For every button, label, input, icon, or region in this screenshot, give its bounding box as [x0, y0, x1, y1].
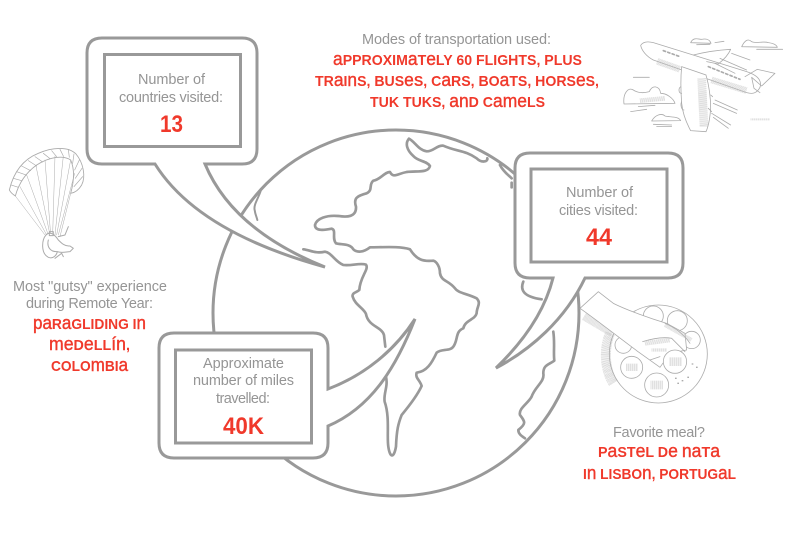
text block: favorite meal — [583, 425, 736, 483]
text block: transportation: TUK TUKS, anD CameLS — [370, 90, 545, 111]
text block: transportation: TRaInS, BUSeS, CaRS, BOaTS, HORSeS, — [315, 69, 599, 90]
text block: favorite meal: In LISBOn, PORTUGaL — [583, 462, 736, 483]
text block: transportation: aPPROXIMaTeLY 60 FLIGHTS, PLUS — [333, 48, 582, 69]
bubble: cities visited: cities visited: — [559, 203, 638, 219]
icon: pastel de nata plate and hand — [580, 292, 707, 403]
text block: gutsy experience: meDeLLín, — [49, 333, 130, 354]
icon: airplane — [624, 39, 783, 132]
bubble: countries visited: countries visited: — [119, 90, 223, 106]
label: Number of — [138, 72, 206, 88]
bubble: miles travelled: number of miles — [193, 373, 294, 389]
text block: transportation — [315, 32, 599, 111]
text block: transportation: Modes of transportation used: — [362, 32, 551, 48]
text block: gutsy experience: COLOmBIa — [51, 354, 129, 375]
text block: favorite meal: Favorite meal? — [613, 425, 705, 441]
value: 40K — [223, 413, 265, 440]
continents outline — [254, 139, 554, 455]
label: Approximate — [203, 356, 284, 372]
icon: paraglider — [9, 148, 84, 258]
globe — [213, 130, 579, 496]
text block: gutsy experience — [13, 279, 167, 375]
text block: gutsy experience: paRaGLIDING In — [33, 312, 146, 333]
bubble: miles travelled — [159, 319, 415, 458]
value: 44 — [586, 224, 613, 251]
text block: favorite meal: PaSTeL De naTa — [598, 440, 721, 461]
value: 13 — [160, 111, 183, 138]
bubble: countries visited — [87, 38, 325, 267]
label: Number of — [566, 185, 634, 201]
bubble: cities visited — [496, 153, 683, 368]
text block: gutsy experience: during Remote Year: — [26, 296, 153, 312]
bubble: miles travelled: travelled: — [216, 391, 270, 407]
text block: gutsy experience: Most "gutsy" experience — [13, 279, 167, 295]
